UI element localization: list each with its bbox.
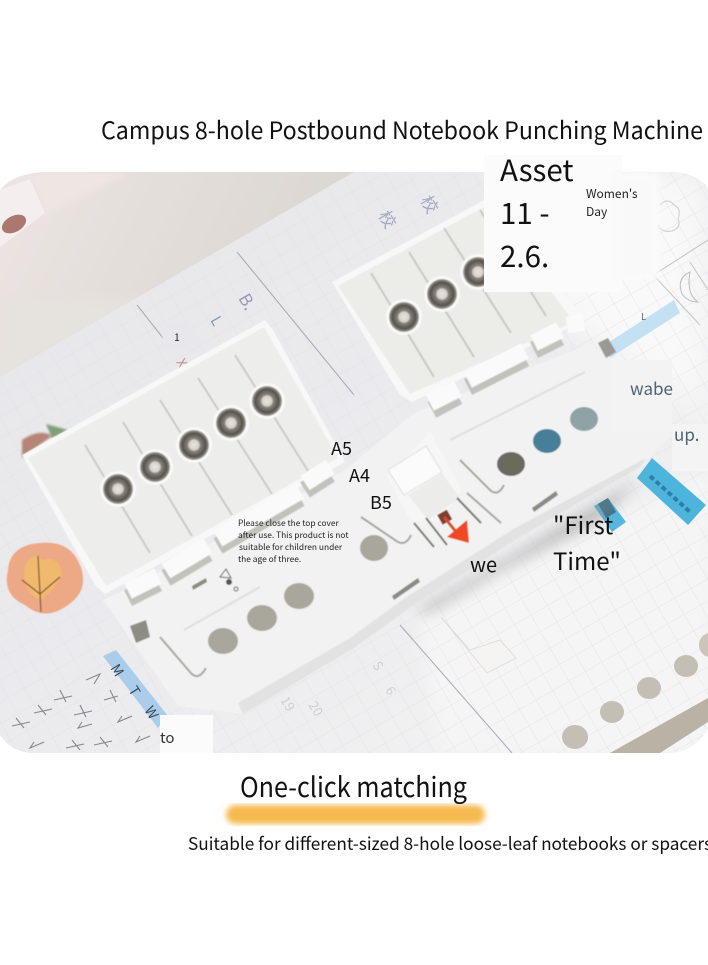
label: First Time: Time" — [553, 542, 621, 577]
rivets — [100, 383, 285, 507]
label: to: to — [160, 727, 175, 748]
handwritten marks on notebook: L — [206, 312, 228, 330]
photo: notebook and punching machine — [0, 172, 708, 753]
handwritten marks on notebook: 校 — [374, 205, 404, 232]
hinges — [128, 322, 584, 598]
caption: Suitable for different-sized 8-hole loose-leaf notebooks or spacers — [188, 831, 708, 856]
label: Asset: 2.6. — [500, 234, 549, 276]
warning note: the age of three. — [238, 553, 301, 565]
label: First Time — [553, 506, 621, 577]
faint calendar numbers: 6 — [382, 682, 402, 698]
size labels: B5 — [370, 489, 392, 515]
apple sticker — [22, 424, 68, 458]
patch behind up. — [672, 424, 708, 471]
label: Asset: 11 - — [500, 191, 550, 233]
label: up.: up. — [674, 421, 699, 446]
blue M T W tape: M — [106, 660, 129, 680]
pen on desk — [0, 176, 110, 246]
warning note: Please close the top cover — [238, 517, 340, 529]
notebook ruled lines — [137, 240, 708, 753]
grips and slots — [160, 372, 585, 676]
faint calendar numbers: 19 — [277, 692, 300, 714]
blue M T W tape — [103, 650, 168, 728]
label: wabe: wabe — [630, 375, 673, 400]
faint calendar numbers — [280, 662, 396, 716]
base body — [103, 345, 672, 714]
white patch behind Asset text — [484, 155, 660, 292]
label: First Time: "First — [553, 506, 613, 541]
warning note: suitable for children under — [239, 541, 343, 553]
warning note — [238, 517, 349, 565]
right blue tape — [594, 458, 706, 532]
desk background — [0, 172, 354, 753]
ghost doodle note — [441, 617, 516, 673]
lid right — [332, 197, 585, 402]
check marks grid — [12, 674, 150, 750]
patch behind 1 — [164, 325, 192, 349]
size labels: A4 — [349, 462, 370, 488]
handwritten marks on notebook: 校 — [416, 190, 446, 217]
faint calendar numbers: S — [369, 657, 389, 674]
red arrow — [437, 510, 469, 543]
notebook punched holes — [562, 633, 708, 749]
leaf sticker — [7, 543, 83, 614]
label: Asset: Asset — [500, 148, 573, 190]
subheading: One-click matching — [240, 765, 467, 805]
warning icon — [220, 569, 238, 591]
label: Women's Day — [586, 185, 638, 220]
handwritten marks on notebook — [173, 190, 446, 371]
base holes — [208, 407, 598, 654]
warning note: after use. This product is not — [238, 529, 349, 541]
size labels: A5 — [331, 435, 352, 461]
title: Campus 8-hole Postbound Notebook Punching Machine — [101, 111, 703, 146]
size labels — [331, 435, 392, 515]
label: 1: 1 — [174, 330, 180, 345]
label: Women's Day: Women's — [586, 185, 638, 202]
label: we: we — [470, 549, 497, 578]
punching machine — [22, 197, 672, 714]
label: Women's Day: Day — [586, 203, 608, 220]
grid paper — [0, 172, 708, 753]
handwritten marks on notebook: B. — [234, 288, 263, 314]
label: Asset — [500, 148, 573, 276]
label: L: L — [641, 309, 646, 323]
faint calendar numbers: 20 — [305, 697, 328, 719]
device shadow — [415, 478, 640, 612]
blue M T W tape: T — [124, 682, 145, 700]
lid ribs — [85, 355, 310, 553]
pale blue tape — [603, 300, 680, 358]
doodles: cloud and moon — [658, 201, 698, 302]
patch behind to — [160, 715, 213, 753]
patch behind wabe — [612, 360, 672, 432]
blue M T W tape: W — [140, 702, 163, 723]
notebook lower edge — [610, 698, 708, 753]
lid left — [22, 320, 345, 594]
handwritten marks on notebook: X — [173, 354, 193, 371]
slider block — [388, 446, 502, 548]
orange highlight — [226, 805, 485, 824]
